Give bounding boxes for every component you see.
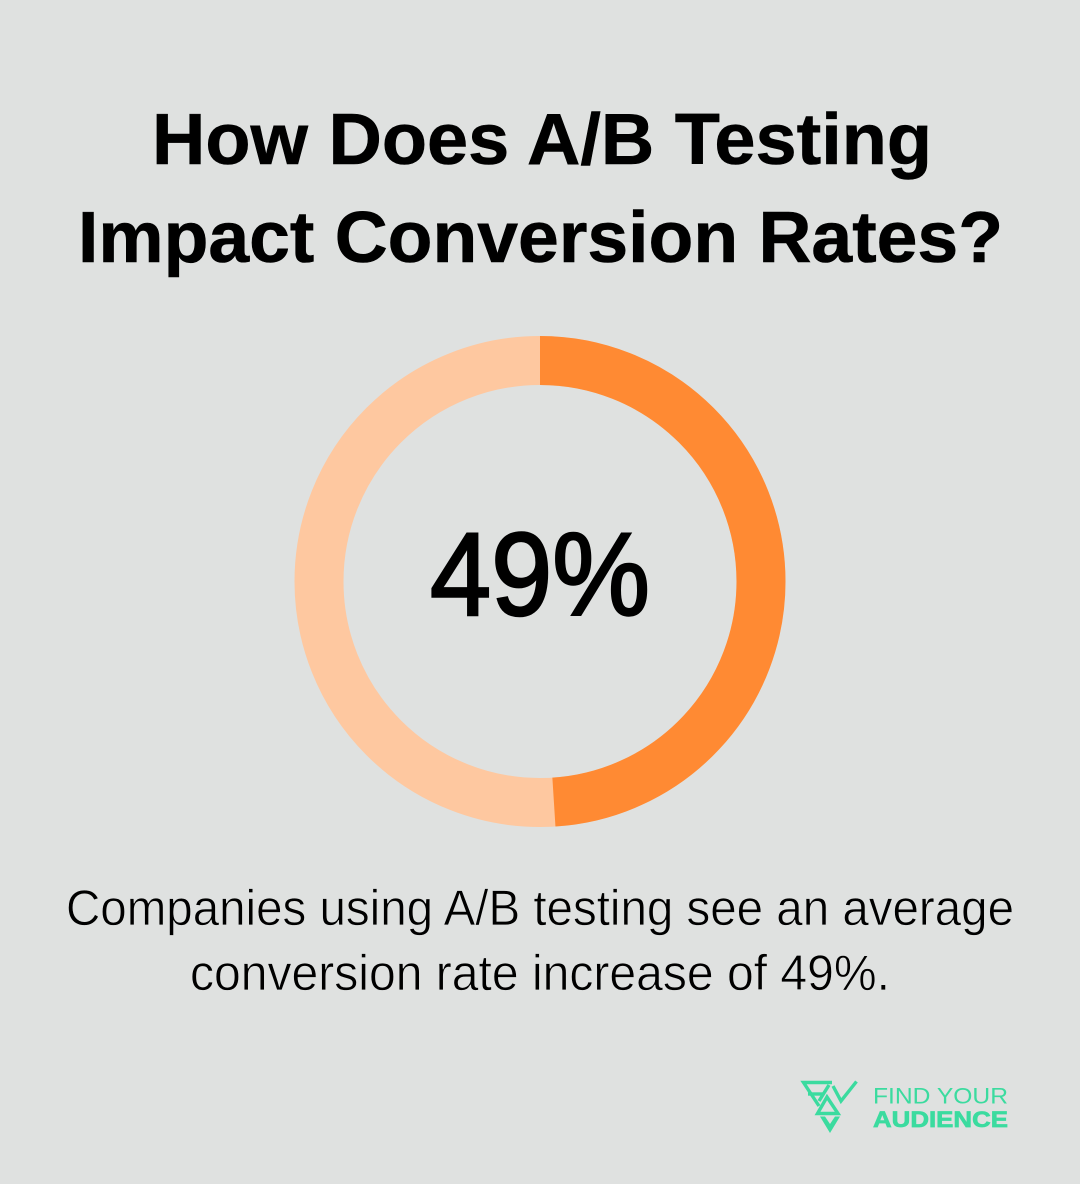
title [78,100,1003,278]
title: How Does A/B Testing [152,100,932,180]
description: Companies using A/B testing see an average [66,880,1014,936]
title: Impact Conversion Rates? [78,198,1003,278]
wordmark: AUDIENCE [873,1107,1008,1132]
description: conversion rate increase of 49%. [190,945,890,1001]
logo: Find Your Audience [804,1082,1008,1133]
wordmark: FIND YOUR [873,1084,1008,1108]
donut chart: 49% [319,360,761,802]
description [66,880,1014,1001]
icon: logo triangles [804,1082,856,1133]
wordmark [873,1084,1008,1132]
donut value: 49% [430,509,650,641]
